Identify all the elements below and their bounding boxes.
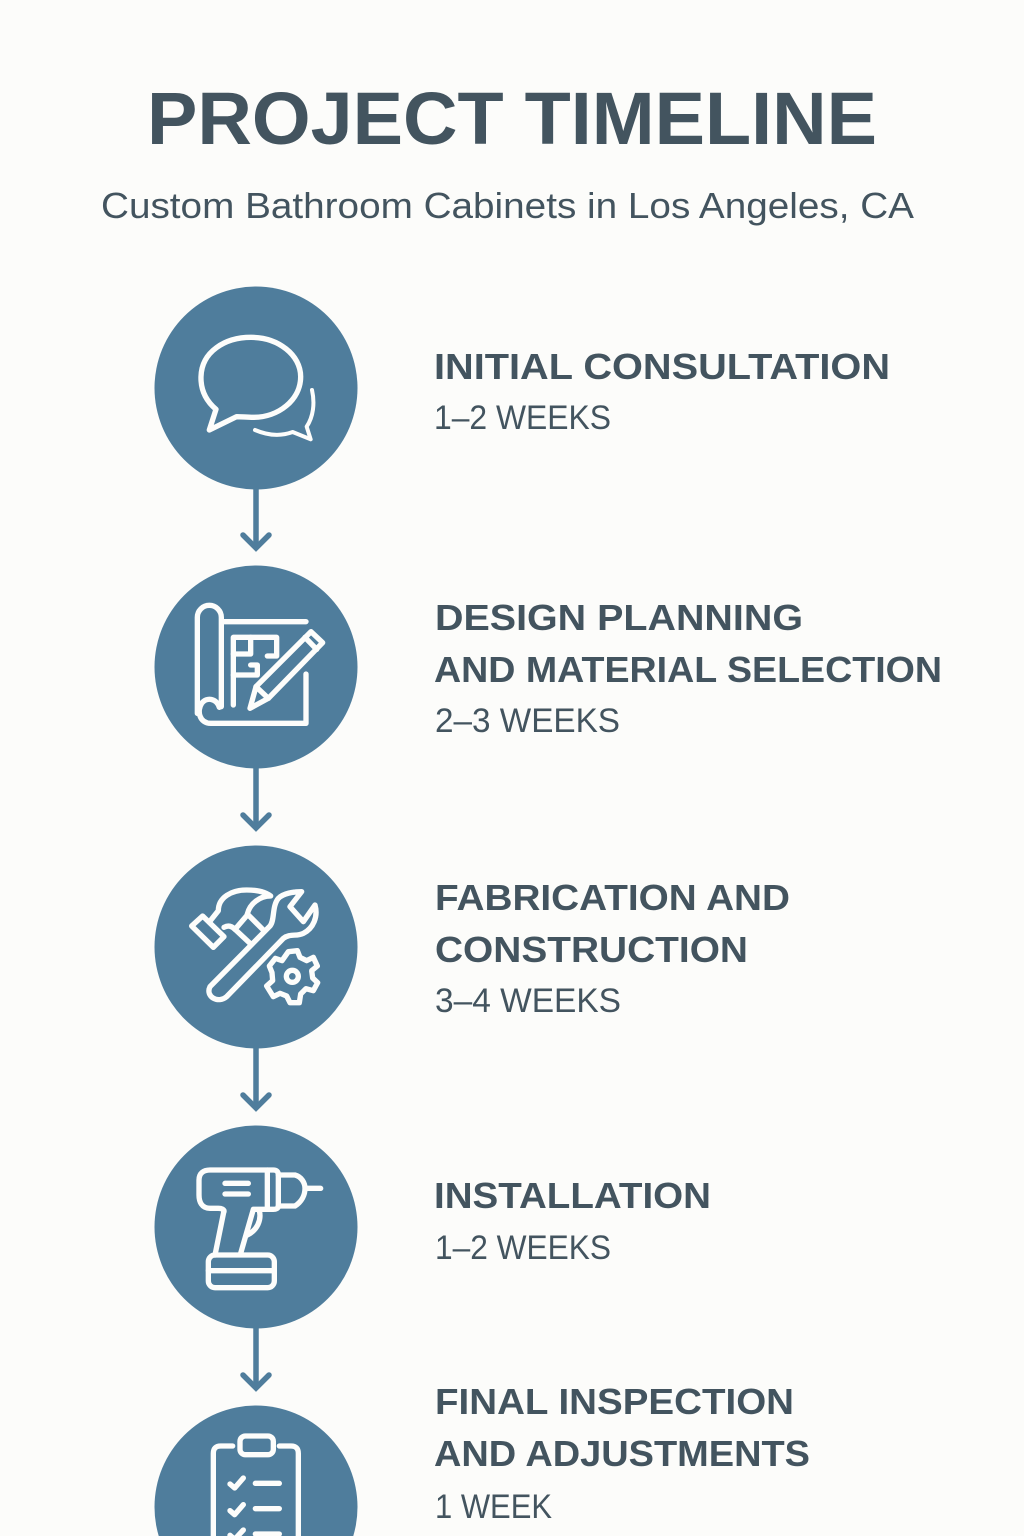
step 3: fabrication <box>154 846 790 1108</box>
arrow 3 <box>243 1048 269 1108</box>
arrow 2 <box>243 768 269 828</box>
text: installation <box>434 1175 711 1267</box>
text: fabrication: CONSTRUCTION <box>435 929 748 970</box>
circle 2 <box>154 566 358 768</box>
text: initial consultation: 1–2 WEEKS <box>434 399 611 437</box>
text: fabrication: 3–4 WEEKS <box>435 982 621 1020</box>
text: design planning <box>434 597 942 740</box>
step 4: installation <box>154 1126 711 1388</box>
icon: power drill <box>199 1170 321 1288</box>
arrow 1 <box>243 489 269 548</box>
subtitle: Custom Bathroom Cabinets in Los Angeles, CA <box>101 185 914 226</box>
icon: hammer, wrench and gear <box>192 890 318 1003</box>
title: PROJECT TIMELINE <box>147 77 877 160</box>
text: design planning: DESIGN PLANNING <box>435 597 803 638</box>
icon: blueprint and pencil <box>197 605 323 723</box>
icon: clipboard checklist <box>213 1436 298 1536</box>
text: installation: INSTALLATION <box>434 1175 711 1216</box>
text: installation: 1–2 WEEKS <box>435 1229 611 1267</box>
circle 3 <box>154 846 358 1048</box>
text: initial consultation <box>434 346 890 437</box>
circle 4 <box>154 1126 358 1328</box>
icon: speech bubbles <box>201 337 313 439</box>
arrow 4 <box>243 1328 269 1388</box>
text: final inspection: 1 WEEK <box>435 1488 552 1526</box>
text: design planning: AND MATERIAL SELECTION <box>434 649 942 690</box>
text: final inspection: AND ADJUSTMENTS <box>434 1433 810 1474</box>
circle 5 <box>154 1406 358 1536</box>
text: final inspection: FINAL INSPECTION <box>435 1381 794 1422</box>
step 2: design planning <box>154 566 942 828</box>
step 5: final inspection <box>154 1381 810 1536</box>
text: fabrication: FABRICATION AND <box>435 877 790 918</box>
text: fabrication <box>435 877 790 1020</box>
text: initial consultation: INITIAL CONSULTATION <box>434 346 890 387</box>
circle 1 <box>154 286 358 490</box>
text: final inspection <box>434 1381 810 1526</box>
step 1: initial consultation <box>154 286 890 548</box>
text: design planning: 2–3 WEEKS <box>435 702 620 740</box>
